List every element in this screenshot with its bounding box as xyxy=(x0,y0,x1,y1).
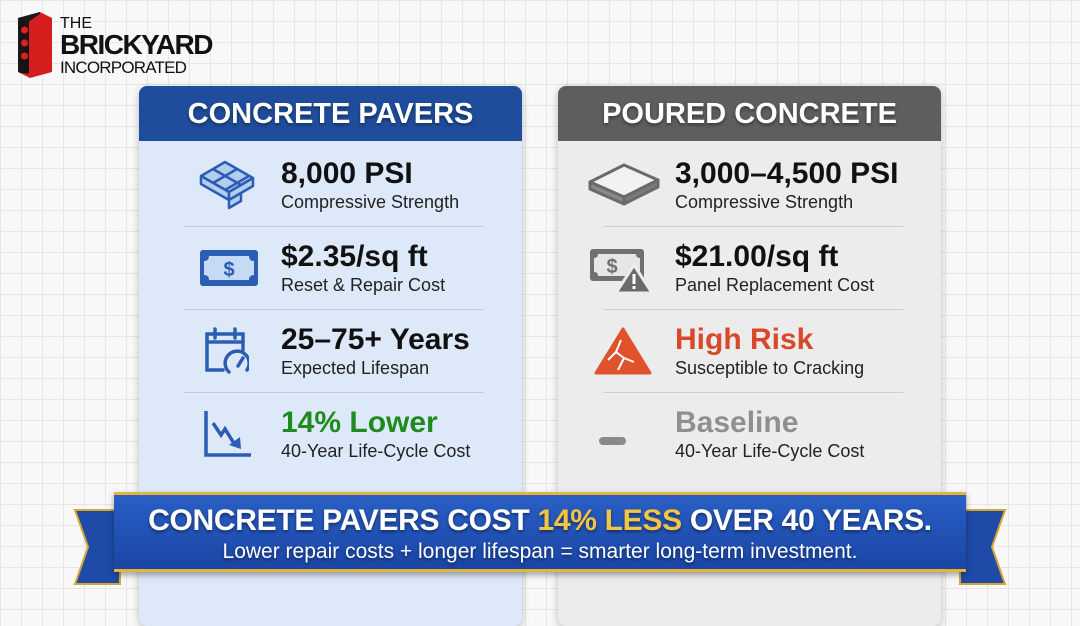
row: lifespan: Expected Lifespan xyxy=(281,358,429,378)
logo text xyxy=(60,15,212,77)
logo text: THE xyxy=(60,15,92,32)
row: life-cycle: 40-Year Life-Cycle Cost xyxy=(281,441,470,461)
row: baseline: Baseline xyxy=(675,406,798,439)
icon: dash xyxy=(599,437,626,445)
heading: concrete pavers: CONCRETE PAVERS xyxy=(188,98,473,130)
row: cracking risk: Susceptible to Cracking xyxy=(675,358,864,378)
icon: calendar gauge xyxy=(205,327,249,374)
banner headline: CONCRETE PAVERS COST 14% LESS OVER 40 YEARS. xyxy=(148,504,932,537)
row: lifespan: 25–75+ Years xyxy=(281,323,470,356)
icon: pavers xyxy=(200,160,254,210)
row: replacement cost: Panel Replacement Cost xyxy=(675,275,874,295)
row: replacement cost: $21.00/sq ft xyxy=(675,240,838,273)
row: strength: Compressive Strength xyxy=(281,192,459,212)
row: repair cost: Reset & Repair Cost xyxy=(281,275,445,295)
icon: dollar bill: $ xyxy=(223,259,235,281)
panel: poured concrete xyxy=(558,86,941,626)
row: replacement cost xyxy=(590,240,874,295)
logo text: BRICKYARD xyxy=(60,29,212,60)
logo xyxy=(18,12,212,78)
icon: bill warning: $ xyxy=(606,256,618,278)
row: cracking risk: High Risk xyxy=(675,323,813,356)
heading: poured concrete: POURED CONCRETE xyxy=(602,98,897,130)
ribbon ends xyxy=(74,509,1006,585)
row: baseline: 40-Year Life-Cycle Cost xyxy=(675,441,864,461)
icon: trend down xyxy=(204,411,251,457)
row: repair cost: $2.35/sq ft xyxy=(281,240,428,273)
icon: slab xyxy=(588,164,660,206)
icon: bill warning xyxy=(590,249,650,292)
row: baseline xyxy=(599,406,864,461)
icon: dollar bill xyxy=(200,250,258,286)
row: strength: 8,000 PSI xyxy=(281,157,413,190)
row: strength: Compressive Strength xyxy=(675,192,853,212)
banner ribbon xyxy=(74,491,1006,585)
row: cracking risk xyxy=(594,323,864,378)
row: strength xyxy=(588,157,899,212)
banner subtext: Lower repair costs + longer lifespan = smarter long-term investment. xyxy=(223,540,857,563)
logo text: INCORPORATED xyxy=(60,58,186,77)
row: lifespan xyxy=(205,323,470,378)
row: life-cycle: 14% Lower xyxy=(281,406,438,439)
heading: concrete pavers xyxy=(139,86,522,141)
row: strength xyxy=(200,157,459,212)
panel: concrete pavers xyxy=(139,86,522,626)
row: strength: 3,000–4,500 PSI xyxy=(675,157,899,190)
icon: brick xyxy=(18,12,52,78)
banner main xyxy=(114,492,966,572)
row: repair cost xyxy=(200,240,445,295)
heading: poured concrete xyxy=(558,86,941,141)
icon: cracked triangle xyxy=(594,327,652,374)
row: life-cycle xyxy=(204,406,470,461)
